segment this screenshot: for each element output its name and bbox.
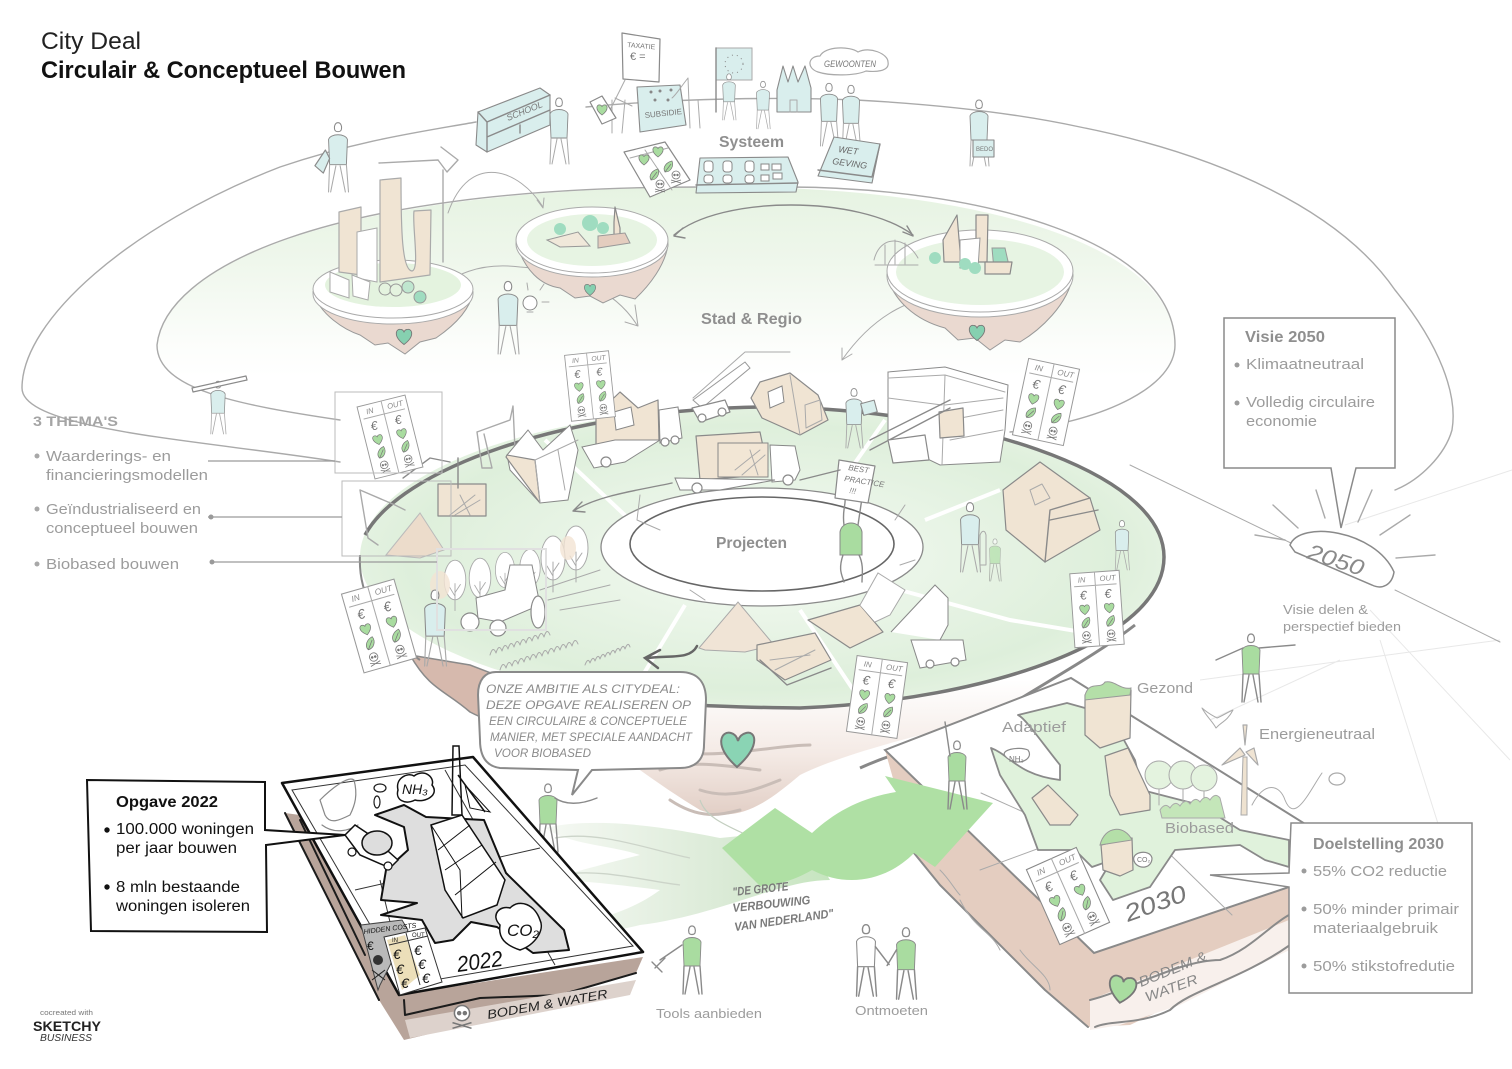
scorecard 5: OUT [373, 582, 394, 597]
speech bubble: ambitie: EEN CIRCULAIRE & CONCEPTUELE [489, 714, 688, 728]
house with loader truck [582, 392, 682, 468]
scorecard 1: IN [365, 406, 375, 416]
floating island: village [516, 207, 668, 303]
speech bubble: ambitie: VOOR BIOBASED [494, 746, 591, 760]
left board: apartment building and crane [431, 746, 505, 918]
figure with best practice sign [835, 460, 886, 582]
labels around right board: Biobased [1165, 820, 1234, 837]
hidden costs card: € [401, 975, 410, 991]
callout: doelstelling 2030 [1210, 823, 1472, 993]
tractor [461, 565, 545, 636]
callout: doelstelling 2030: 50% stikstofredutie [1313, 958, 1455, 975]
labels around right board: Energieneutraal [1259, 726, 1375, 743]
icon: two people [820, 83, 860, 148]
label: systeem: Systeem [719, 134, 784, 151]
callout: opgave 2022: Opgave 2022 [116, 794, 218, 811]
hidden costs card [361, 920, 442, 995]
scorecard 2: IN [572, 357, 579, 365]
hidden costs card: € [414, 942, 423, 958]
handwritten: de grote verbouwing: VAN NEDERLAND" [733, 906, 835, 934]
hidden costs card: IN [392, 938, 398, 944]
timber frame house [751, 373, 828, 435]
text block: 3 themas: Geïndustrialiseerd en [46, 501, 201, 518]
icon: church [757, 66, 811, 129]
scorecard 6: € [887, 676, 897, 692]
soil pile and panel stack [699, 602, 831, 685]
title [41, 28, 406, 84]
right board: map of netherlands [991, 703, 1289, 900]
disk spokes [545, 420, 1130, 700]
label: projecten: Projecten [716, 535, 787, 552]
text block: 3 themas: conceptueel bouwen [46, 520, 198, 537]
label: stad en regio: Stad & Regio [701, 311, 802, 328]
speech bubble: ambitie [478, 672, 706, 795]
callout: doelstelling 2030: materiaalgebruik [1313, 920, 1439, 937]
callout: visie 2050: Visie 2050 [1245, 329, 1325, 346]
scorecard 3: € [1031, 376, 1042, 392]
callout: doelstelling 2030: 55% CO2 reductie [1313, 863, 1447, 880]
left board: plate with map [282, 757, 643, 995]
arrows between islands [437, 172, 980, 360]
scorecard 4: € [1079, 588, 1088, 603]
family with children [961, 503, 1130, 581]
figure with best practice sign: PRACTICE [844, 474, 886, 489]
icon: subsidie box [637, 78, 700, 132]
icon: speaking person [539, 784, 597, 852]
scorecard 4: € [1104, 586, 1113, 601]
label: ontmoeten: Ontmoeten [855, 1003, 928, 1018]
scorecard 1: € [393, 412, 404, 428]
speech bubble: ambitie: ONZE AMBITIE ALS CITYDEAL: [486, 682, 680, 696]
right board: soil [885, 750, 1290, 1030]
scorecard 3: € [1056, 381, 1067, 398]
ring: systeem outer ellipse [22, 98, 1453, 490]
left board: polar bear on ice [320, 779, 358, 831]
labels around right board [1002, 680, 1375, 837]
icon: person with bag [970, 100, 994, 166]
excavator and frame house [477, 406, 578, 503]
scorecard 4 [1070, 570, 1124, 648]
crop rows [490, 570, 630, 670]
callout: visie 2050: Klimaatneutraal [1246, 356, 1364, 373]
callout: doelstelling 2030: 50% minder primair [1313, 901, 1459, 918]
figure with best practice sign: BEST [848, 463, 871, 475]
callout: opgave 2022: per jaar bouwen [116, 840, 237, 857]
icon: law book: WET [838, 144, 860, 157]
icon: bird [1202, 708, 1233, 728]
arrow: big green arrow [722, 776, 993, 886]
icon: law book [818, 137, 880, 183]
logo: sketchy business [33, 1008, 102, 1044]
speech bubble: ambitie: DEZE OPGAVE REALISEREN OP [486, 698, 691, 712]
icon: two people meeting [857, 925, 916, 999]
text block: 3 themas: Biobased bouwen [46, 556, 179, 573]
title: Circulair & Conceptueel Bouwen [41, 57, 406, 84]
icon: taxatie sign: € = [630, 51, 646, 63]
handwritten: de grote verbouwing: VERBOUWING [732, 893, 811, 915]
left board: nh3 cloud [374, 773, 434, 808]
icon: person with bag: BEDO [976, 147, 993, 153]
figure with best practice sign: !!! [849, 486, 857, 496]
left board: soil [285, 813, 643, 1040]
center ring with projecten [601, 488, 923, 606]
icon: taxatie sign [590, 33, 660, 133]
board year 2022: 2022 [454, 946, 504, 977]
icon: gewoonten cloud [810, 48, 888, 75]
handwritten: de grote verbouwing: "DE GROTE [732, 879, 790, 899]
callout: doelstelling 2030: Doelstelling 2030 [1313, 836, 1444, 853]
bodem en water, right [1107, 948, 1209, 1005]
left board: nh3 cloud: NH₃ [402, 781, 428, 797]
title: City Deal [41, 28, 141, 55]
bodem en water, right: BODEM & [1136, 948, 1209, 990]
digger with panel [808, 573, 966, 668]
bodem en water, right: WATER [1143, 971, 1200, 1005]
sun 2050: 2050 [1303, 539, 1368, 581]
bodem en water, left [452, 987, 609, 1028]
logo: sketchy business: SKETCHY [33, 1018, 102, 1034]
floating island: city with bridge [874, 215, 1073, 350]
icon: taxatie sign: TAXATIE [627, 42, 656, 51]
arrow: disk flow [573, 470, 840, 512]
icon: walking man with bag [315, 123, 348, 192]
scorecard 3 [1012, 358, 1080, 446]
hidden costs card: € [393, 946, 402, 962]
floating island: large city [313, 147, 473, 354]
themes frames and connectors [208, 392, 546, 630]
scorecard 6 [846, 656, 908, 738]
handwritten: de grote verbouwing [732, 879, 835, 934]
left board: cement truck [345, 825, 398, 870]
speech bubble: ambitie: MANIER, MET SPECIALE AANDACHT [490, 730, 694, 744]
text block: 3 themas: 3 THEMA'S [33, 413, 118, 429]
person with plan [846, 389, 877, 448]
icon: subsidie box: SUBSIDIE [644, 107, 682, 120]
label: visie delen [1283, 602, 1401, 634]
projects disk [360, 407, 1164, 768]
callout: visie 2050: economie [1246, 413, 1317, 430]
scorecard 3: OUT [1057, 368, 1076, 380]
scorecard 5 [341, 579, 417, 673]
text block: 3 themas: Waarderings- en [46, 448, 171, 465]
hidden costs card: € [418, 956, 427, 972]
heart in funnel [721, 733, 754, 767]
hidden costs card: OUT [412, 933, 425, 939]
sun 2050 [1255, 490, 1435, 587]
scorecard 2: € [596, 366, 604, 379]
scorecard 7: € [1067, 867, 1081, 884]
icon: law book: GEVING [832, 156, 868, 171]
labels around right board: Gezond [1137, 680, 1193, 697]
scorecard 5: € [382, 598, 394, 615]
icon: gewoonten cloud: GEWOONTEN [824, 59, 876, 69]
icon: person carrying plank [192, 376, 247, 434]
scorecard 1 [357, 395, 423, 479]
hidden costs card: € [396, 961, 405, 977]
text block: 3 themas [33, 413, 208, 573]
right board: buildings and nature: CO₂ [1137, 857, 1150, 864]
scorecard 1: € [369, 418, 380, 434]
scorecard 7: IN [1035, 865, 1048, 878]
modular building with crane [870, 367, 1008, 465]
icon: EU flag [716, 48, 752, 120]
callout: visie 2050: Volledig circulaire [1246, 394, 1375, 411]
excavator on soil pile with panel [360, 458, 486, 558]
icon: school building [476, 88, 550, 152]
orchard trees [430, 526, 588, 611]
right board: plate [885, 678, 1310, 953]
icon: wind turbine [1222, 725, 1345, 815]
right board: buildings and nature [1004, 682, 1225, 876]
icon: person with open arms [1216, 634, 1295, 702]
scorecard 5: IN [350, 592, 362, 604]
bodem en water, left: BODEM & WATER [486, 987, 609, 1022]
ring: stad en regio ellipse [157, 187, 1175, 440]
scorecard 4: OUT [1099, 573, 1117, 583]
callout: opgave 2022: 8 mln bestaande [116, 879, 240, 896]
scorecard 6: OUT [886, 663, 904, 674]
farmer [425, 590, 446, 666]
icon: table sheet [624, 142, 690, 197]
left board: co2 cloud: CO₂ [507, 921, 540, 940]
scorecard 7: OUT [1057, 851, 1078, 868]
icon: game board [696, 157, 798, 193]
callout: opgave 2022 [87, 780, 345, 932]
icon: person pointing on arrow [945, 722, 967, 809]
label: visie delen: perspectief bieden [1283, 619, 1401, 634]
horizon lines [1200, 470, 1512, 830]
callout: opgave 2022: woningen isoleren [115, 898, 250, 915]
scorecard 2: OUT [591, 354, 607, 363]
scorecard 2: € [574, 369, 582, 381]
icon: walking woman [550, 98, 569, 164]
label: visie delen: Visie delen & [1283, 602, 1368, 617]
logo: sketchy business: cocreated with [40, 1008, 93, 1017]
left board: co2 cloud [496, 903, 541, 950]
scorecard 1: OUT [386, 398, 405, 411]
mobile crane [692, 352, 790, 422]
green flow streams [545, 800, 830, 932]
hidden costs card: HIDDEN COSTS [363, 923, 417, 936]
labels around right board: Adaptief [1002, 719, 1067, 736]
hidden costs card: € [422, 970, 431, 986]
arrow: curved dark arrow on disk [645, 646, 697, 668]
callout: visie 2050 [1224, 318, 1395, 528]
funnel under projects disk [530, 680, 1060, 815]
icon: person with wrench [652, 926, 702, 994]
flat-bed truck with panels [675, 432, 800, 493]
icon: tan barn house [1003, 462, 1100, 562]
label: tools aanbieden: Tools aanbieden [656, 1006, 762, 1021]
scorecard 3: IN [1034, 363, 1044, 374]
logo: sketchy business: BUSINESS [40, 1033, 92, 1044]
right board: buildings and nature: NH₃ [1009, 755, 1024, 764]
icon: school building: SCHOOL [505, 99, 544, 123]
scorecard 2 [565, 351, 615, 421]
rock under disk [410, 655, 535, 724]
text block: 3 themas: financieringsmodellen [46, 467, 208, 484]
scorecard 6: IN [863, 659, 873, 670]
icon: woman with light bulb [498, 281, 549, 354]
scorecard 4: IN [1078, 575, 1086, 585]
scorecard 5: € [355, 606, 368, 623]
board year 2030: 2030 [1120, 880, 1191, 928]
scorecard 7 [1026, 847, 1110, 945]
scorecard 6: € [862, 672, 872, 688]
hidden costs card: € [367, 939, 374, 953]
callout: opgave 2022: 100.000 woningen [116, 821, 254, 838]
scorecard 7: € [1042, 878, 1056, 895]
